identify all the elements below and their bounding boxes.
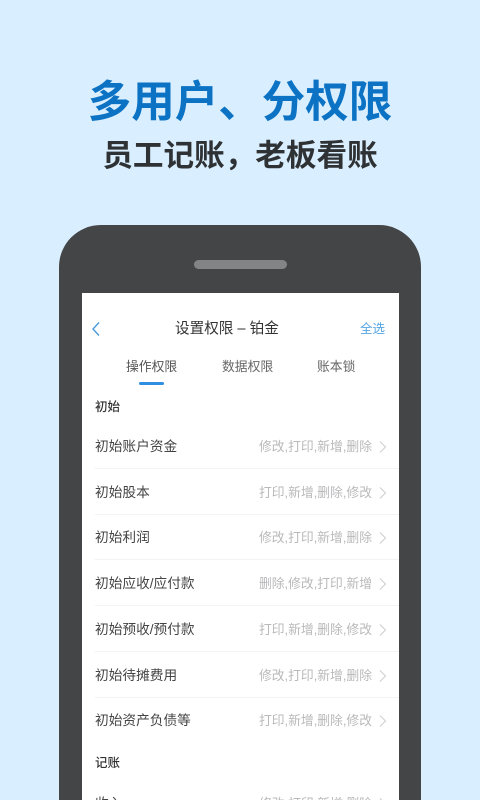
tab: operation permissions: 操作权限 [126, 359, 177, 374]
row: initial deferred expenses: 初始待摊费用 [95, 668, 177, 683]
row: initial share capital [95, 485, 386, 500]
row: initial deferred expenses: 修改,打印,新增,删除 [259, 668, 372, 683]
row: initial account funds [95, 439, 386, 454]
row: initial account funds: 修改,打印,新增,删除 [259, 439, 372, 454]
row: initial receivables and payables: 删除,修改,打印,新增 [259, 576, 372, 591]
row: initial receivables and payables: 初始应收/应付款 [95, 576, 195, 591]
tab: ledger lock: 账本锁 [317, 359, 355, 374]
row: initial share capital: 打印,新增,删除,修改 [259, 485, 372, 500]
icon: back arrow [92, 322, 100, 336]
row: income [95, 796, 382, 800]
row: initial advance receipts and payments: 初始预收/预付款 [95, 622, 195, 637]
phone mockup [59, 225, 421, 800]
row: initial account funds: 初始账户资金 [95, 439, 177, 454]
section heading: bookkeeping: 记账 [95, 756, 120, 770]
row: initial receivables and payables [95, 576, 386, 591]
row: initial deferred expenses [95, 668, 386, 683]
subtitle: 员工记账，老板看账 [102, 139, 378, 173]
row: initial advance receipts and payments [95, 622, 386, 637]
panel: app screen [82, 293, 399, 800]
row: initial advance receipts and payments: 打印,新增,删除,修改 [259, 622, 372, 637]
row: initial profit [95, 530, 386, 545]
select all link: 全选 [360, 322, 385, 336]
title: 多用户、分权限 [88, 79, 392, 127]
row: initial assets and liabilities [95, 713, 386, 728]
phone speaker [194, 260, 287, 269]
row: initial profit: 初始利润 [95, 530, 150, 545]
tab: data permissions: 数据权限 [222, 359, 273, 374]
row: initial assets and liabilities: 初始资产负债等 [95, 713, 191, 728]
row: initial profit: 修改,打印,新增,删除 [259, 530, 372, 545]
screen heading: 设置权限 – 铂金 [175, 321, 279, 337]
section heading: initial: 初始 [95, 400, 120, 414]
tab: active underline [139, 382, 164, 385]
row: initial assets and liabilities: 打印,新增,删除,修改 [259, 713, 372, 728]
row: initial share capital: 初始股本 [95, 485, 150, 500]
